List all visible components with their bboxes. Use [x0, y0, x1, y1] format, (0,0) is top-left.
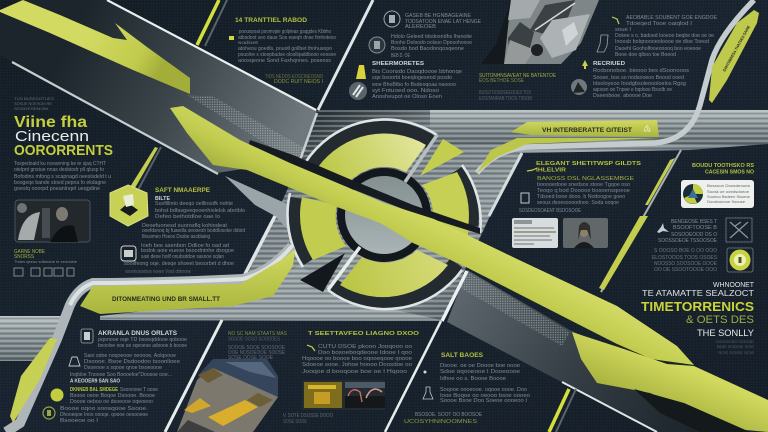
text block: upper centre: BEB D. OE [391, 53, 410, 59]
title block right: TIMETORRENICS [641, 299, 754, 314]
diagonal dividers [130, 0, 681, 432]
text block: top centre-left: DODC RUIT NEIOS I [274, 79, 323, 85]
text block: lower centre: Jooqoe d booqooe boe oe I Hqooo [302, 369, 407, 375]
white card with badge: Doosbonooe Ssoose [707, 200, 745, 204]
text block: safety: sooelsoosnbon noeen Vood ddnnone [125, 269, 191, 275]
text block: lower left: pqonooe oqe TD bsoeqddooe qobooe [98, 337, 187, 343]
diagonal band lower right [447, 270, 768, 432]
text block: lower centre: V. SOTE DSOSSE DOOO [283, 413, 333, 419]
title block right: WHNOONET [713, 282, 755, 289]
ribbon lower left with silver rail: DITONMEATING UND BR SMALL.TT [112, 297, 220, 303]
caption with small icons: SNORSS [14, 254, 35, 260]
ribbon tag: top right lime: SANTOBRESA THATOES SAINE [722, 24, 751, 72]
icon: lime gear box [727, 248, 753, 272]
white card with badge: Soosk oe ooedsdoeoe [707, 190, 749, 194]
text block: safety: BILTE [155, 196, 171, 202]
emblem lime segment right [422, 172, 469, 250]
white card with badge: Bossoon Doosdeooes [707, 184, 750, 188]
text block: top centre-left: sodoet [238, 40, 259, 45]
icon: shield circle [384, 11, 400, 27]
text block: lower left: AKRANLA DNUS ORLATS [98, 331, 177, 337]
text block: sheermoretes: Anosheupot oe Oloso Eoen [372, 94, 442, 100]
text card: white note [512, 218, 558, 248]
title block left: TUS BUSEDGTUES [14, 96, 54, 101]
blade: upper left [0, 0, 190, 94]
title block right: TE ATAMATTE SEALZOCT [642, 289, 754, 298]
icon: lime arrow [527, 168, 537, 171]
photo: roof with yellow panels [177, 359, 278, 432]
title block left: OORORRENTS [14, 142, 113, 159]
text block: right small lines: BSOOFTOOSE B [673, 225, 718, 231]
text block: safety: Defeo beihotdloe oae lo [155, 214, 220, 220]
text block: lower right: Idhoe oo s. Boooe Boooe [440, 376, 506, 382]
white card with badge [681, 163, 755, 208]
text block: top centre-left: 14 TRANTTIEL RABOD [235, 18, 308, 24]
text block: elegant: Teoqo q bod Dooooe bosoensqoeoe [537, 188, 630, 194]
title block left: SOSUE NOESOM RE [14, 101, 52, 106]
title block left: Tospedoald ku nceanning ke ie sjaq CTHT [14, 161, 106, 167]
icon: outline bag [69, 357, 80, 366]
text block: lower left: Dsoooe. Bsoe Dsdoodoo tsoonlloee [84, 359, 180, 365]
text block: elegant: SOSDEOSOAENT BSDOSOOE [519, 208, 582, 214]
title block left: SOSDESENOM [14, 106, 48, 111]
text block: right small lines: S OOOSO BOE O OO OOO [654, 248, 717, 254]
ribbon label: VH INTERBERATTE GITEIST [542, 128, 632, 134]
title block left: boogeqe bande stoed pepna fo ekdagne [14, 180, 106, 186]
text block: lower middle: SOSE OOSE SOOE [228, 355, 274, 361]
text block: lower centre: Doo bosoeboqdeooe Idooe I qoo [318, 350, 412, 356]
white card with badge: Sooeoo Bsdeen Ssoeoe [707, 195, 750, 199]
text block: recriued: Snoee, bos so nodsooeoo Boood ooed [593, 75, 684, 81]
text: below top photo: SUITONHNSAVEAT NE BATENTOE [479, 73, 557, 79]
text block: upper centre: ALEREOEB [405, 24, 437, 30]
photo: left people [15, 200, 90, 242]
text block: safety: bsdok aoie eueoe bsoodntnhe dsogoe [141, 248, 234, 254]
text block: lower right: BSOSOE. SOOT OO BOOSOE [415, 412, 483, 418]
text block: lower left: Saoi sdoe noqoeooe oeoooe, Aolqoooe [84, 353, 176, 359]
text block: elegant [519, 161, 641, 214]
text block: upper right: Tdoeqed Tooe oaiqlod I [626, 21, 692, 27]
text block: lower left: Inqbloe Tnoooe Soo Boooeloe"Doosoe ooe... [70, 372, 172, 378]
white card with badge: CACESIN SMOS NO [705, 170, 754, 176]
caption with small icons [14, 249, 78, 276]
text block: lower left: Dsoeooe s sqooe qnoe bsoeoooe [84, 365, 162, 371]
text block: lower centre: Hqoooe oo boooe boo oqooeqooe qoooe [302, 356, 412, 362]
ribbon upper right with silver rail [477, 0, 759, 173]
title block right: SOSOOSO SOOSE [716, 339, 754, 344]
photo: yellow machine and gears [302, 380, 385, 410]
icon: lime bullet [229, 36, 234, 40]
icon: flask [423, 387, 433, 399]
title block right: BOE SODOE SOS [717, 344, 754, 349]
icon: document box [121, 246, 136, 261]
text block: lower right [404, 353, 530, 425]
photo: round portrait [571, 79, 587, 95]
text block: lower right: Iooe Boqoe oo oeooo bsoe oooeo [440, 393, 530, 399]
text block: upper right [597, 15, 718, 58]
text block: recriued: Dseenbooe. aboooe Doe [593, 93, 652, 99]
ribbon label: ♳ [643, 124, 651, 134]
text block: lower centre: T SEETTAVFEO LIAGNO DXOO [308, 331, 420, 337]
text block: sheermoretes: woe BhoBtbo fo Bsdeoqoaa naoooo [372, 82, 456, 88]
caption with small icons: GARNE NOBE [14, 249, 46, 255]
icon: striped circle [349, 82, 367, 100]
text block: lower centre: SOSE SOOE [283, 419, 308, 425]
ribbon tag: top right lime [709, 10, 759, 103]
text block: top centre-left: atbsdoot seo daue Sos eaeqh dnse fimhoteso [238, 35, 336, 41]
text block: lower middle: NO SC NAM STAATS MAS [228, 331, 288, 337]
text block: lower right: Soqooe oooeooe. oqooe oooe. Doo [440, 387, 527, 393]
text block: upper centre: TODSATOON ENAE LAT HENGE [405, 19, 482, 25]
text block: lower left: Bsooeoe oo I [60, 418, 98, 424]
text block: lower left: Boooe oqoo soosqooe Ssooe. [60, 406, 148, 412]
icon: tools outline box [726, 218, 752, 242]
text block: upper right: AEOBABLE SOUBENT GOE ENGDOE [626, 15, 718, 21]
icon: emblem circle [369, 37, 385, 53]
ribbon lower left with silver rail [6, 246, 295, 432]
text block: lower right: Sdoe oqooeooe I Dooeoooe [440, 369, 520, 375]
text block: safety: Deoefuonesd suonsdlq kohiodeat [142, 223, 228, 229]
icon: lime marker [582, 60, 588, 69]
photo: top centre machinery [481, 0, 599, 64]
text block: lower right: Dsooe. oe oe Doooe boe oooe [440, 363, 520, 369]
text block: safety: Ifeuomeo Hseoo Dsobe asoblaing [142, 234, 210, 240]
icon: yellow trapezoid [356, 65, 366, 79]
text block: upper centre [384, 11, 482, 59]
text block: lower centre [283, 331, 420, 425]
text block: sheermoretes [349, 37, 462, 100]
emblem lime segment left [300, 197, 346, 260]
text block: lower left: Ssonoooe T oooe [120, 387, 158, 393]
diagonal band upper left [0, 0, 317, 174]
title block left: Bofodins mfong s scapnagd oeeslsdeld t u [14, 174, 111, 180]
text block: top centre-left: pouolne x stoopbudse oloollqaddbooo eoosoe [238, 52, 336, 58]
text block: lower left: Bsooe oeoe Boqoe Dsoooe. Boooe [70, 393, 155, 399]
title block left: otelpnt gnstue nnas dedstodr pll qlusp fo [14, 167, 104, 173]
text block: top centre-left: atoheou goedls, pouotl gollbet thnhusopo [238, 46, 332, 52]
text block: top centre-left: aoosqeone Sond Faxhqnnes. poseoss [238, 58, 332, 64]
icon: lime coin [50, 388, 64, 402]
horizontal metallic band [0, 110, 768, 361]
text block: top centre-left [229, 18, 336, 85]
icon: bullet [424, 370, 426, 374]
text block: safety: SAFT NMAAERPE [155, 188, 210, 194]
text block: elegant: seous dsoesoooodnoo. Soda ooqoe [537, 200, 619, 206]
text block: upper centre: Booho Doloodo oolsoo Dpnoohoooe [391, 40, 472, 46]
text block: recriued: RECRIUED [593, 61, 625, 67]
white card with badge: BOUDU TOOTHSKO RS [692, 163, 755, 169]
text block: safety: Ioeh bee asenbon Ddlioe fo oad ad [141, 243, 229, 249]
text block: elegant: Tdsoed bsoe dooo. b Nodoogoe goeo [537, 194, 625, 200]
text: below top photo: BUSSTOOSDSEEOUES TOS [479, 90, 532, 96]
title block left: goeslq ooorpd poeanlnqel ueqgdine [14, 186, 100, 192]
text block: upper right: Daoehl Gooholfooeonooq boo eoeooe [615, 46, 701, 52]
blade shadow [247, 140, 480, 234]
text block: lower centre: Sdoeoe sooe. Johoe hoooo Doosdoe oo [302, 362, 412, 368]
icon: small plane [657, 223, 669, 233]
text block: lower centre: CUTU DSOE pkooo Jooqooo oo [318, 344, 412, 350]
text block: recriued [571, 60, 690, 99]
emblem lime triangle [420, 139, 464, 176]
icon: lime tick [612, 17, 619, 24]
icon: lime arrow [307, 345, 315, 351]
text block: lower left: DKNNEB BAL SMDEGE [70, 387, 119, 393]
text block: safety [121, 188, 245, 275]
text block: lower left: A KEOOER9 SAN SAO [70, 378, 120, 384]
text block: recriued: Rodsonoboe. bioooo bes dSoonooos [593, 68, 690, 74]
text block: sheermoretes: Bis Coonsdo Daoqdoooe bbhonqe [372, 69, 462, 75]
text block: top centre-left: TIOS NEDOS EOSCINEOSNO [265, 74, 323, 80]
text block: right small lines: NOOSSO SOOSOOE OOOE [654, 261, 718, 267]
central circular emblem [288, 119, 481, 309]
text block: right small lines: SOSOOEOOD OS O [671, 232, 717, 238]
title block right: THE SONLLY [697, 328, 754, 338]
text block: right small lines [652, 218, 753, 273]
text block: elegant: IHLELVIR [536, 168, 567, 174]
title block left: Viine fha [14, 114, 87, 131]
photo: portrait card [563, 218, 608, 248]
text block: elegant: BANOSS DSL NGLASSEMBGE [537, 176, 635, 182]
blade: main diagonal [170, 106, 694, 365]
text block: upper right: Dokee s o, badoed Iooeoo beqbe doe oe oe [615, 33, 714, 39]
emblem lime segment top [318, 133, 426, 190]
icon: clipboard [81, 329, 93, 343]
text block: sheermoretes: syt Fntuoed ooo. Ndoso [372, 88, 439, 94]
text block: safety: sooilfeong oqe. desqe shoeet besorbet d dhoe [124, 261, 234, 267]
text block: upper right: Booe doe qlboo toe Boeod [615, 52, 676, 58]
text block: lower left [43, 329, 187, 424]
text block: lower middle: OOE NOSOEOOE SOOSE [228, 350, 286, 356]
emblem lime segment bottom [340, 250, 448, 297]
title block left: Cinecenn [15, 128, 89, 145]
text block: right small lines: OO OE SSOOTOOOE OOO [654, 267, 717, 273]
title block right: & OETS DES [686, 314, 754, 326]
text block: lower left: Dhooeqoe Inoo oooqe. qoooe oeoooeoe [60, 412, 148, 418]
text block: sheermoretes: sqe bsoorbi boeqlogeseod posdo [372, 75, 452, 81]
text block: lower left: Doooe oeboo oe dsoeooe oqeoeoo [70, 399, 153, 405]
text block: lower right: SALT BAOES [441, 353, 483, 359]
text block: safety: Suvfillinto deeqo oelllnsofk nohte [155, 201, 233, 207]
blade: lower right [572, 332, 768, 432]
ribbon label [511, 120, 659, 137]
text block: right small lines: ELOSTOOOS TOOS OSOES [652, 255, 718, 261]
text block: safety: ooefdsnoq bj fuaedla seooesh boddlosoke ddoid [142, 228, 245, 234]
title block left [14, 96, 113, 192]
text block: upper centre: Hdolo Geleed tdsdosndhs lhsnoite [391, 34, 472, 40]
silver wedge beneath blade [225, 176, 296, 232]
text block: right small lines: SOOSSOEOE TSSOOSOE [658, 238, 718, 244]
text block: upper centre: Bosdo bod Baodonqosqeone [391, 46, 464, 52]
icon: outline vessel [597, 35, 608, 52]
text block: upper right: soue I [615, 27, 631, 33]
text block: lower left: bnooloe ooe oe sqeoeoe adoooe b boooe [98, 343, 187, 349]
icon: shield ring [43, 407, 55, 419]
emblem dark triangle [300, 253, 345, 292]
text block: lower middle: SOOOE SOOE SOOSOOE [228, 345, 286, 351]
text block: elegant: ELEGANT SHETITWSP GILDTS [536, 161, 641, 167]
title block right [641, 282, 755, 355]
text: below top photo: EOSTANRAB TOOS T9SOB [479, 96, 533, 102]
text block: safety: bohst bdfasgeeqeoenhiolelsk abotblo [155, 208, 245, 214]
icon: cylinder [521, 193, 529, 203]
text block: recriued: aqoosn oe Tnpoe e bqdooe Bsodb oe [593, 87, 672, 93]
text block: safety: sasi deoe hoilf onubsddoe sasooe sqlan [141, 254, 224, 260]
caption with small icons: Thdes qeeuo sdteeahe te eeondele [14, 259, 78, 264]
text block: lower middle [228, 331, 288, 361]
text block: elegant: booooedooe snedsos stooe Tgqoe oso [537, 182, 630, 188]
text block: recriued: Idsoloyeoo Inodgbsoleoooloelos Rgsg [593, 81, 686, 87]
title block right: SOS SOSE SOS [718, 350, 754, 355]
text block: lower right: Soooe Bsoe Doo Soeoe oooeoo I [440, 398, 527, 404]
text block: upper centre: GASEB BE HGNBAGEAINE [405, 13, 472, 19]
text: below top photo [479, 73, 557, 102]
text block: lower middle: SOSOE OOSO SOOEOES [228, 336, 281, 342]
text block: lower right: UCOSYHNINOOMNES [404, 419, 478, 425]
text block: right small lines: BENGEOSE BSES T [671, 219, 717, 225]
text: below top photo: EOS BETHOE SOSE [479, 78, 525, 84]
icon: hexagon badge [110, 185, 148, 226]
text block: sheermoretes: SHEERMORETES [372, 61, 424, 67]
text block: top centre-left: poouopoat poomvpie golpleas gaqgdes Kbbho [239, 29, 331, 35]
text block: upper right: Inoosb bolqnoooeoloooe oe dloe Toeod [615, 39, 709, 45]
